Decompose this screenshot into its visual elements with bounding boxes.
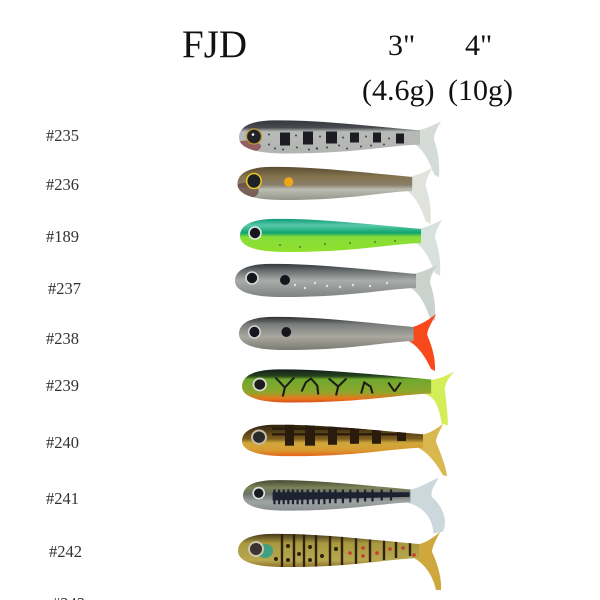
- catalog chart: [46, 32, 512, 600]
- size heading 3 inch: [362, 29, 434, 107]
- label #242: #242: [49, 542, 82, 561]
- lure #238: [239, 314, 436, 371]
- size heading 4 inch: 4": [465, 29, 492, 62]
- lure #242: [238, 532, 441, 590]
- lure #241: [243, 478, 445, 534]
- lure #236: [232, 167, 432, 224]
- lure #240: [242, 424, 447, 476]
- title: FJD: [182, 23, 247, 66]
- lure #237: [235, 264, 437, 321]
- label #239: #239: [46, 376, 79, 395]
- label #237: #237: [48, 279, 81, 298]
- label #189: #189: [46, 227, 79, 246]
- size heading 3 inch: 3": [388, 29, 415, 62]
- lure #235: [233, 120, 441, 178]
- size heading 3 inch: (4.6g): [362, 74, 434, 107]
- label #240: #240: [46, 433, 79, 452]
- lure #189: [240, 219, 442, 276]
- lure #239: [242, 369, 454, 426]
- label #235: #235: [46, 126, 79, 145]
- label #241: #241: [46, 489, 79, 508]
- label #236: #236: [46, 175, 79, 194]
- size heading 4 inch: [448, 29, 513, 107]
- size heading 4 inch: (10g): [448, 74, 513, 107]
- label #238: #238: [46, 329, 79, 348]
